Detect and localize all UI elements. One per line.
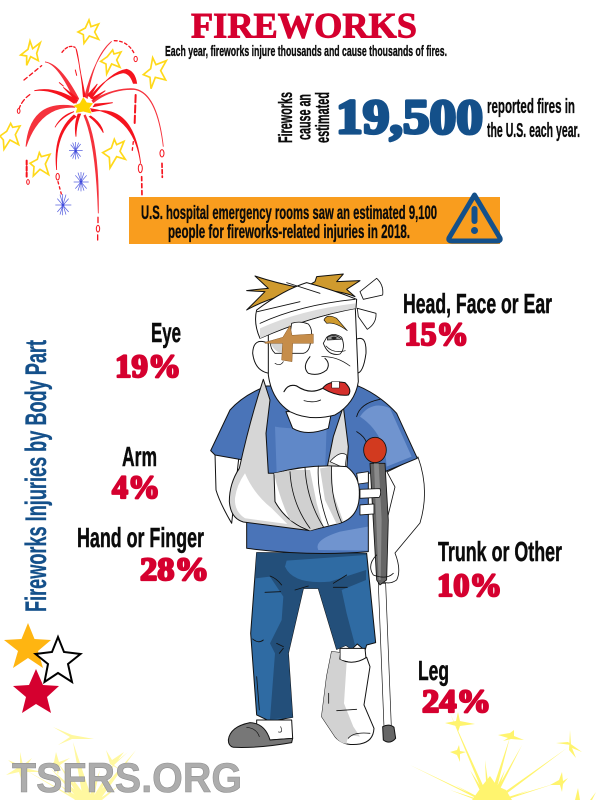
rotated lead-in text: cause an <box>294 94 316 140</box>
callout: emergency rooms <box>129 197 500 244</box>
rotated lead-in text <box>276 92 334 143</box>
label: arm: 4% <box>112 470 160 506</box>
blue starbursts <box>55 142 89 215</box>
shoe <box>257 720 293 740</box>
bandage knot <box>357 278 383 329</box>
gold star <box>4 623 51 668</box>
callout: emergency rooms: people for fireworks-related injuries in 2018. <box>168 222 410 243</box>
label: hand or finger <box>77 522 209 588</box>
illustration: injured man <box>211 274 425 747</box>
ears <box>253 338 366 373</box>
footer wordmark: TSFRS.ORG <box>12 754 242 800</box>
lower body <box>228 553 396 747</box>
vertical heading: Fireworks Injuries by Body Part <box>20 340 53 612</box>
red star <box>13 669 59 713</box>
outline star <box>36 637 80 682</box>
nose <box>305 357 328 374</box>
big number: 19,500 <box>336 89 483 144</box>
dashed streak ends <box>19 41 162 240</box>
title: FIREWORKS <box>191 6 417 46</box>
label: eye <box>115 317 181 385</box>
right eye <box>323 334 343 354</box>
rotated lead-in text: estimated <box>313 92 334 143</box>
fires stat <box>276 89 580 144</box>
label: hand or finger: Hand or Finger <box>77 522 204 553</box>
label: trunk or other <box>437 536 562 604</box>
label: eye: 19% <box>115 349 181 385</box>
label: head, face or ear <box>403 288 552 353</box>
hand grip fingers <box>371 555 393 577</box>
sparkler: bottom left <box>6 727 136 800</box>
fingers <box>357 472 381 515</box>
label: arm: Arm <box>122 441 157 472</box>
mouth <box>284 385 323 392</box>
crutch shaft and tip <box>378 583 391 727</box>
eyebrow <box>324 316 347 331</box>
label: leg: Leg <box>418 655 449 686</box>
bare arms <box>215 447 240 523</box>
rotated lead-in text: Fireworks <box>276 92 297 143</box>
label: eye: Eye <box>151 317 181 348</box>
icon: warning triangle <box>449 195 500 241</box>
leg cast <box>340 648 366 664</box>
label: hand or finger: 28% <box>140 552 209 588</box>
hair <box>247 274 360 310</box>
label: arm <box>112 441 160 506</box>
yellow outline stars <box>0 20 166 176</box>
left eye <box>271 322 312 353</box>
tape cross <box>265 326 313 362</box>
label: leg <box>418 655 491 720</box>
fires stat description <box>487 96 580 142</box>
icon: fireworks burst <box>0 20 166 240</box>
upper body <box>211 274 425 585</box>
label: leg: 24% <box>422 684 491 720</box>
crutch grip <box>370 463 388 585</box>
arm cast <box>274 466 359 531</box>
label: head, face or ear: 15% <box>404 317 468 353</box>
label: trunk or other: 10% <box>437 568 502 604</box>
sparkler: bottom right <box>410 712 596 800</box>
sling highlight <box>235 473 287 524</box>
red burst streaks <box>26 41 163 213</box>
neck collar <box>286 412 332 432</box>
shirt <box>211 385 417 554</box>
crutch red ball <box>364 437 386 463</box>
burst centre star <box>73 97 93 113</box>
sling <box>229 379 347 531</box>
decorative stars <box>4 623 80 713</box>
head <box>268 300 358 418</box>
head bandage <box>256 283 357 338</box>
jeans <box>251 553 376 721</box>
